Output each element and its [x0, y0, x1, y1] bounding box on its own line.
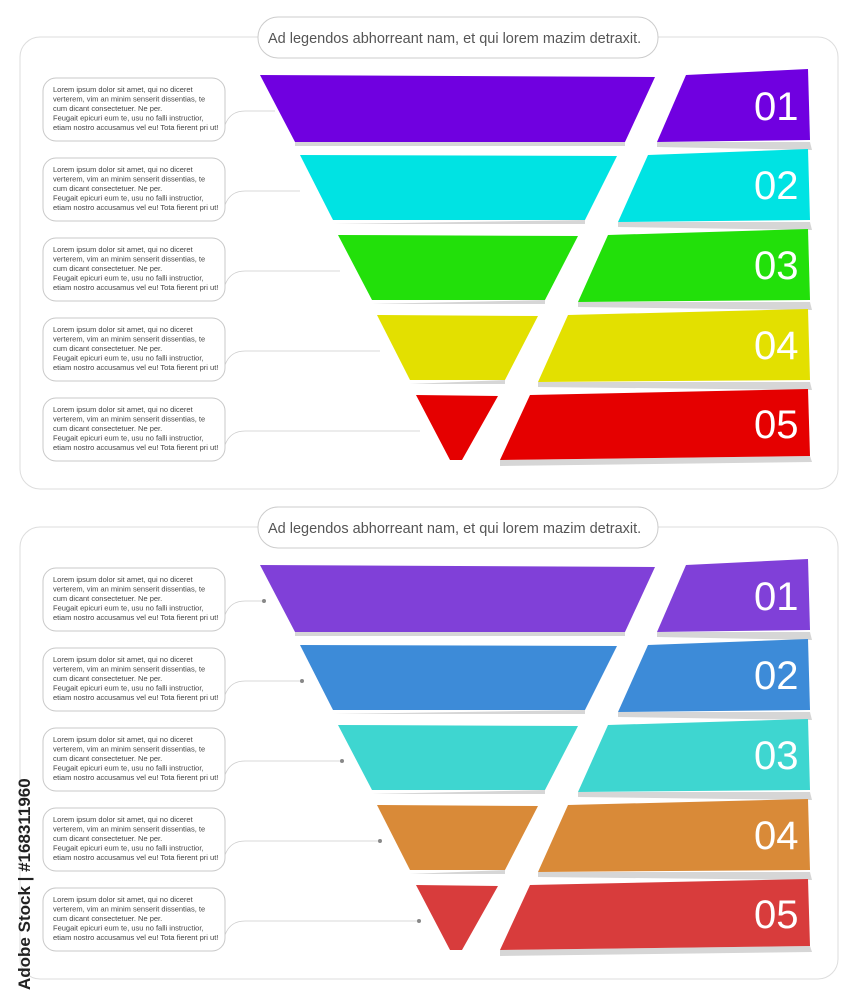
title pill: Ad legendos abhorreant nam, et qui lorem mazim detraxit. [268, 521, 641, 537]
funnel bars [260, 69, 812, 466]
funnel bars: 04 [754, 814, 798, 858]
title pill [258, 17, 658, 58]
text boxes [43, 568, 421, 951]
funnel bars: 02 [754, 654, 798, 698]
funnel bars: 01 [754, 575, 798, 619]
title pill: Ad legendos abhorreant nam, et qui lorem mazim detraxit. [268, 31, 641, 47]
funnel bars [260, 559, 812, 956]
funnel bars: 02 [754, 164, 798, 208]
funnel bars: 05 [754, 403, 798, 447]
funnel bars: 04 [754, 324, 798, 368]
funnel bars: 01 [754, 85, 798, 129]
funnel bars: 03 [754, 734, 798, 778]
title pill [258, 507, 658, 548]
panel: bottom funnel [20, 507, 838, 979]
panel: top funnel [20, 17, 838, 489]
text boxes [43, 78, 420, 461]
funnel bars: 03 [754, 244, 798, 288]
watermark id text: Adobe Stock | #168311960 [15, 778, 34, 990]
funnel bars: 05 [754, 893, 798, 937]
